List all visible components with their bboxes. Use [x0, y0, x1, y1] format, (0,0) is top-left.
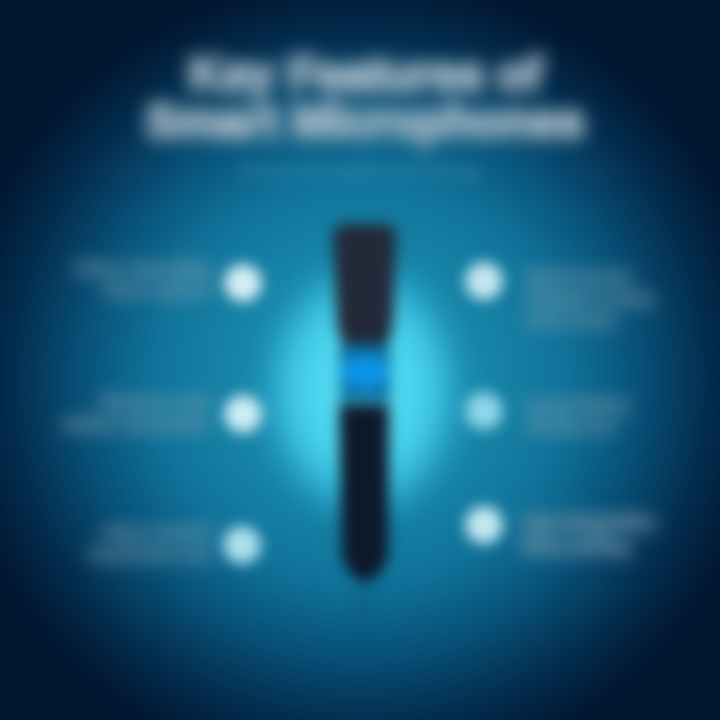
microphone head: [333, 224, 396, 344]
feature icon: middle left: [224, 395, 262, 433]
feature text: top left: Noise Cancelling: [75, 259, 212, 278]
feature text: top right: Auto levels: [525, 311, 616, 330]
feature icon: middle right: [465, 392, 503, 430]
feature text: middle right: [519, 389, 636, 444]
feature text: bottom left: Voice Control: [103, 523, 212, 542]
feature text: bottom right: App Integration: [522, 512, 655, 532]
subtitle: Advanced audio technology: [237, 160, 483, 182]
feature text: top right: [518, 261, 660, 337]
feature text: middle right: Long Battery: [525, 395, 630, 414]
feature text: middle right: All-day use: [525, 417, 616, 436]
feature text: bottom right: [513, 504, 663, 566]
feature icon: top right: [465, 262, 503, 300]
feature text: middle left: [56, 386, 216, 442]
feature text: bottom left: [82, 516, 218, 572]
feature text: top left: Clear capture: [103, 281, 212, 300]
title: Key Features of: [189, 47, 541, 100]
feature text: top right: Smart Sound: [525, 267, 631, 286]
feature icon: bottom left: [223, 526, 261, 564]
microphone handle: [339, 404, 389, 582]
feature icon: bottom right: [465, 506, 503, 544]
feature text: bottom right: Easy pairing: [522, 536, 629, 556]
feature text: top right: Adaptive tuning: [525, 289, 653, 308]
microphone collar: [340, 344, 390, 400]
feature icon: top left: [224, 264, 262, 302]
feature text: top left: [68, 252, 218, 308]
feature text: middle left: Stable connection: [64, 415, 210, 434]
microphone illustration: [324, 214, 406, 592]
title: [134, 42, 596, 159]
title: Smart Microphones: [146, 94, 584, 147]
feature text: middle left: Wireless Link: [101, 393, 210, 412]
central background glow: [265, 265, 460, 515]
feature text: bottom left: Hands-free use: [89, 545, 212, 564]
blue light band: [342, 355, 388, 389]
microphone cable: [362, 580, 367, 628]
